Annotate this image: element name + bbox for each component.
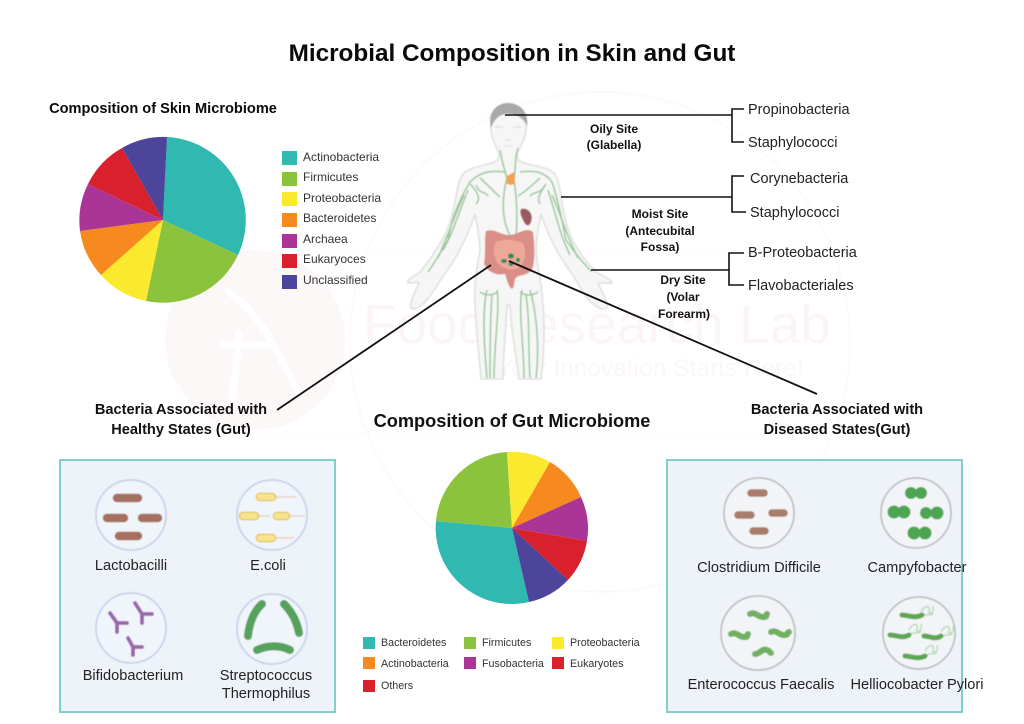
site bacteria labels: Staphylococci <box>748 135 837 151</box>
site labels: Moist Site <box>632 207 689 221</box>
site bacteria labels: B-Proteobacteria <box>748 245 858 261</box>
title: Microbial Composition in Skin and Gut <box>289 40 735 67</box>
icon: helicobacter <box>883 597 955 669</box>
panel: diseased bacteria <box>667 460 984 712</box>
label: streptococcus: Thermophilus <box>222 686 310 702</box>
legend: gut: Proteobacteria <box>570 637 640 649</box>
lymph vessels <box>428 148 592 378</box>
icon: enterococcus <box>721 596 795 670</box>
watermark: Your Innovation Starts Here! <box>497 355 804 382</box>
connector: moist site <box>561 176 746 212</box>
body outline <box>408 104 612 379</box>
face <box>495 127 521 146</box>
site labels: Oily Site <box>590 122 638 136</box>
icon: e.coli <box>237 480 307 550</box>
microbe dots <box>508 254 514 258</box>
site labels: (Volar <box>666 290 700 304</box>
label: bifidobacterium: Bifidobacterium <box>83 668 183 684</box>
legend: skin: Firmicutes <box>303 170 358 184</box>
label: clostridium: Clostridium Difficile <box>697 560 821 576</box>
small intestine <box>494 240 525 270</box>
legend: skin: Bacteroidetes <box>303 211 376 225</box>
heart <box>506 172 515 185</box>
site labels: Dry Site <box>660 273 706 287</box>
connector: dry site <box>591 253 744 285</box>
legend: gut <box>363 637 640 692</box>
legend: skin <box>282 150 381 289</box>
heading: diseased states: Bacteria Associated with <box>751 402 923 418</box>
site labels: Fossa) <box>641 240 679 254</box>
label: e.coli: E.coli <box>250 558 286 574</box>
label: campylobacter: Campyfobacter <box>868 560 967 576</box>
pie chart: gut microbiome <box>436 452 588 604</box>
heading: skin pie: Composition of Skin Microbiome <box>49 101 277 117</box>
legend: skin: Unclassified <box>303 273 368 287</box>
icon: lactobacilli <box>96 480 166 550</box>
site bacteria labels: Flavobacteriales <box>748 278 854 294</box>
site labels: (Glabella) <box>587 138 641 152</box>
legend: gut: Firmicutes <box>482 637 531 649</box>
connector: oily site <box>505 109 744 142</box>
heading: gut pie: Composition of Gut Microbiome <box>374 411 650 431</box>
label: enterococcus: Enterococcus Faecalis <box>688 677 834 693</box>
icon: bifidobacterium <box>96 593 166 663</box>
site labels: Forearm) <box>658 307 710 321</box>
legend: gut: Fusobacteria <box>482 658 544 670</box>
label: streptococcus: Streptococcus <box>220 668 312 684</box>
connector: diseased gut <box>509 261 817 394</box>
label: helicobacter: Helliocobacter Pylori <box>850 677 984 693</box>
heading: diseased states: Diseased States(Gut) <box>764 422 911 438</box>
watermark: FoodResearch Lab <box>363 293 831 355</box>
connector: healthy gut <box>277 265 491 410</box>
hair <box>490 103 527 128</box>
site labels: (Antecubital <box>625 224 695 238</box>
icon: clostridium <box>724 478 794 548</box>
heading: healthy states: Bacteria Associated with <box>95 402 267 418</box>
legend: gut: Actinobacteria <box>381 658 449 670</box>
pie chart: skin microbiome <box>79 137 246 303</box>
site labels <box>587 122 710 321</box>
site bacteria labels: Propinobacteria <box>748 102 850 118</box>
label: lactobacilli: Lactobacilli <box>95 558 167 574</box>
icon: streptococcus <box>237 594 307 664</box>
legend: gut: Bacteroidetes <box>381 637 446 649</box>
icon: campylobacter <box>881 478 951 548</box>
site bacteria labels <box>748 102 858 294</box>
human body illustration <box>408 103 612 379</box>
large intestine <box>484 230 534 289</box>
legend: skin: Archaea <box>303 232 348 246</box>
legend: gut: Eukaryotes <box>570 658 623 670</box>
site bacteria labels: Corynebacteria <box>750 171 849 187</box>
watermark <box>165 92 850 592</box>
spleen <box>520 209 532 225</box>
site bacteria labels: Staphylococci <box>750 205 839 221</box>
legend: skin: Actinobacteria <box>303 150 379 164</box>
heading: healthy states: Healthy States (Gut) <box>111 422 251 438</box>
legend: skin: Proteobacteria <box>303 191 381 205</box>
legend: gut: Others <box>381 680 413 692</box>
panel: healthy bacteria <box>60 460 335 712</box>
legend: skin: Eukaryoces <box>303 252 366 266</box>
